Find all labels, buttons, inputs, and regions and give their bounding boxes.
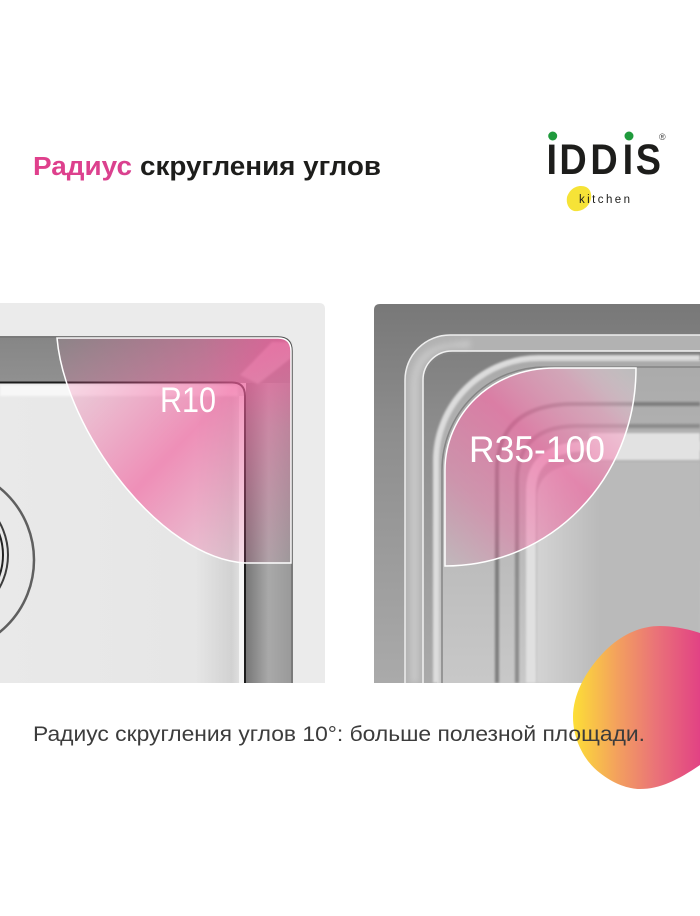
caption: Радиус скругления углов 10°: больше полезной площади.: [33, 723, 645, 746]
title: [33, 153, 381, 181]
bowl inner edge: [0, 382, 245, 683]
panel: R35-100 sink photo: [374, 304, 700, 683]
sink channel: [0, 338, 290, 383]
title: скругления углов: [140, 153, 381, 181]
rim band: [405, 335, 700, 683]
drain: [0, 486, 36, 634]
light wall band: [590, 433, 700, 460]
bowl floor: [537, 462, 700, 683]
panel: R10 sink photo: [0, 303, 325, 683]
logo: IDDIS kitchen: [547, 132, 666, 211]
sink rim line: [0, 337, 292, 683]
logo wordmark: IDDIS: [547, 135, 661, 184]
label R10: R10: [160, 381, 216, 420]
highlight: R10 quarter: [57, 338, 291, 563]
grooves: [497, 404, 700, 683]
logo kitchen word: kitchen: [579, 194, 630, 206]
decorative gradient blob: [573, 626, 700, 789]
highlight: R35-100 leaf: [445, 368, 636, 566]
label R35-100: R35-100: [469, 429, 605, 470]
logo green dots: [548, 132, 634, 140]
bowl wall: [437, 360, 700, 683]
title: Радиус: [33, 153, 132, 181]
logo yellow spot: [567, 186, 591, 211]
rim highlights: [405, 335, 700, 683]
registered mark: ®: [659, 132, 666, 142]
sink bowl: [201, 398, 239, 683]
